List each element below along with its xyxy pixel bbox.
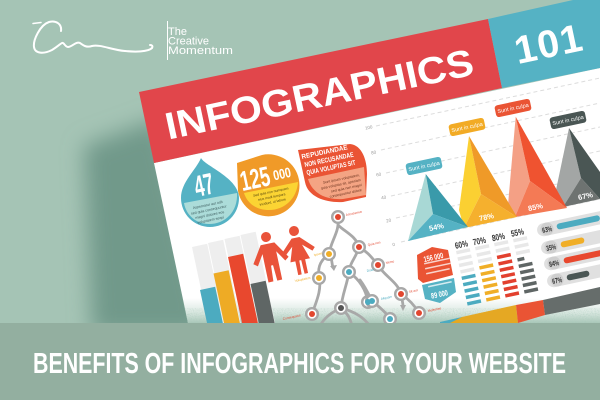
bar track 3 [224, 236, 260, 337]
logo wordmark: Creative [168, 36, 209, 48]
progress pills [536, 206, 600, 288]
tree labels: Accusamus [345, 210, 363, 217]
yellow pyramid [459, 136, 517, 228]
red callout: quia voluptas sit, aperiam [321, 178, 361, 190]
grid lines [376, 78, 600, 242]
logo wordmark: The [168, 26, 187, 38]
column 1 [456, 248, 481, 306]
teal drop stat [181, 158, 239, 227]
column headers: 55% [510, 226, 525, 239]
hexagon stats: 156 000 [423, 251, 445, 264]
red callout: consequuntur dolore [329, 188, 362, 199]
bar gray [250, 281, 278, 343]
tree labels: Voluptatem [294, 276, 311, 283]
pill row 4: 67% [551, 275, 563, 286]
pyramid tag gray: Sunt in culpa [552, 115, 585, 127]
logo divider [167, 21, 168, 60]
tree node dots [309, 214, 422, 322]
orange circle stat: 125 [237, 160, 273, 197]
pyramid percent labels [428, 190, 594, 233]
sheet bottom fade [182, 298, 600, 323]
tree labels: Molestiae [427, 306, 442, 313]
teal drop stat: 47 [191, 168, 217, 204]
column headers: 70% [472, 235, 487, 247]
pyramid tag gray [549, 110, 587, 130]
red callout: sed quia non magni [331, 183, 362, 194]
column headers [454, 226, 525, 251]
bar teal [200, 287, 228, 349]
icon: man and woman [247, 223, 320, 285]
red hexagon [417, 247, 453, 283]
axis labels [364, 124, 396, 247]
tree nodes [306, 211, 425, 325]
vertical bar chart [192, 232, 278, 349]
banner title INFOGRAPHICS: INFOGRAPHICS [162, 42, 477, 148]
pyramid tag teal: Sunt in culpa [408, 161, 441, 173]
axis labels: 40 [381, 194, 387, 200]
pyramid chart [405, 98, 600, 241]
logo wordmark: Momentum [168, 45, 233, 57]
orange pyramid [508, 117, 567, 217]
axis labels: 60 [376, 171, 382, 177]
red callout [298, 144, 367, 202]
axis labels: 80 [371, 149, 377, 155]
decision tree diagram [282, 210, 442, 326]
pyramid tag orange [494, 98, 532, 118]
teal drop stat: magni dolores eos [195, 210, 225, 220]
tree labels: Quia non [367, 240, 381, 247]
tree arrows [330, 265, 406, 311]
orange circle stat: 000 [271, 164, 293, 183]
teal hexagon [422, 278, 456, 303]
tree labels [282, 210, 442, 321]
infographic sheet [139, 0, 600, 349]
bar red [228, 254, 262, 345]
icon: woman [276, 223, 320, 278]
chart grid and axis [364, 78, 600, 247]
bottom colour band [440, 287, 600, 323]
logo wordmark [168, 26, 233, 57]
red callout: NON RECUSANDAE [304, 152, 355, 169]
orange circle stat: eius modi tempora [258, 192, 286, 202]
sheet white body [154, 68, 600, 323]
axis labels: 100 [364, 124, 373, 131]
bar track 2 [208, 240, 244, 341]
red title banner [139, 19, 502, 163]
teal drop stat: Aspernatur aut odit [193, 200, 223, 210]
pill row 2: 35% [545, 242, 557, 253]
pyramid tag orange: Sunt in culpa [497, 103, 530, 115]
pyramid percent labels: 78% [478, 211, 495, 223]
column 4 [513, 236, 538, 294]
hexagon stats: 89 000 [430, 288, 449, 301]
red callout: REPUDIANDAE [301, 144, 349, 161]
teal drop stat: sed quia consequuntur [191, 204, 228, 216]
pyramid percent labels: 67% [577, 190, 594, 202]
banner number 101: 101 [511, 17, 586, 73]
tree connectors [312, 217, 419, 326]
tree labels: Consequatur [282, 313, 302, 321]
teal pyramid [408, 174, 468, 241]
gray pyramid [556, 128, 600, 207]
teal drop stat: voluptatem sequi [197, 215, 225, 225]
column 3 [494, 240, 519, 298]
tree labels: Dolor [366, 267, 376, 273]
orange circle stat: Sed quia non numquam [253, 186, 289, 198]
tree labels: Aliquam [380, 295, 393, 301]
axis labels: 20 [386, 217, 392, 223]
bar track 1 [192, 244, 228, 345]
pyramid percent labels: 85% [527, 201, 544, 213]
column headers: 60% [454, 238, 469, 251]
orange circle stat: incidunt, ut labore [259, 197, 286, 207]
column headers: 80% [491, 231, 506, 243]
blue banner [488, 0, 600, 88]
pill row 1: 63% [541, 224, 553, 235]
segmented columns [454, 226, 538, 306]
tree labels: Nemo [385, 259, 395, 265]
pyramid percent labels: 54% [428, 221, 445, 233]
bar yellow [214, 270, 243, 342]
icon: man [247, 228, 293, 285]
orange circle stat [237, 154, 299, 216]
footer band [0, 323, 600, 400]
red callout: QUIA VOLUPTAS SIT [306, 160, 357, 177]
sheet shadow [84, 118, 210, 335]
axis labels: 0 [392, 242, 396, 247]
column 2 [475, 244, 500, 302]
tree labels: Sit aut [408, 288, 418, 294]
logo signature [33, 21, 152, 53]
red callout: Sunt ipsum voluptatem, [323, 173, 360, 185]
pyramid tag teal [405, 156, 443, 176]
tree labels: Ipsum [313, 251, 323, 257]
logo: The Creative Momentum [33, 21, 233, 60]
pyramid tag yellow [448, 117, 486, 137]
hexagon stats [417, 247, 456, 303]
pyramid tag yellow: Sunt in culpa [451, 122, 484, 134]
pill row 3: 84% [548, 258, 560, 269]
bar track 4 [240, 232, 276, 333]
